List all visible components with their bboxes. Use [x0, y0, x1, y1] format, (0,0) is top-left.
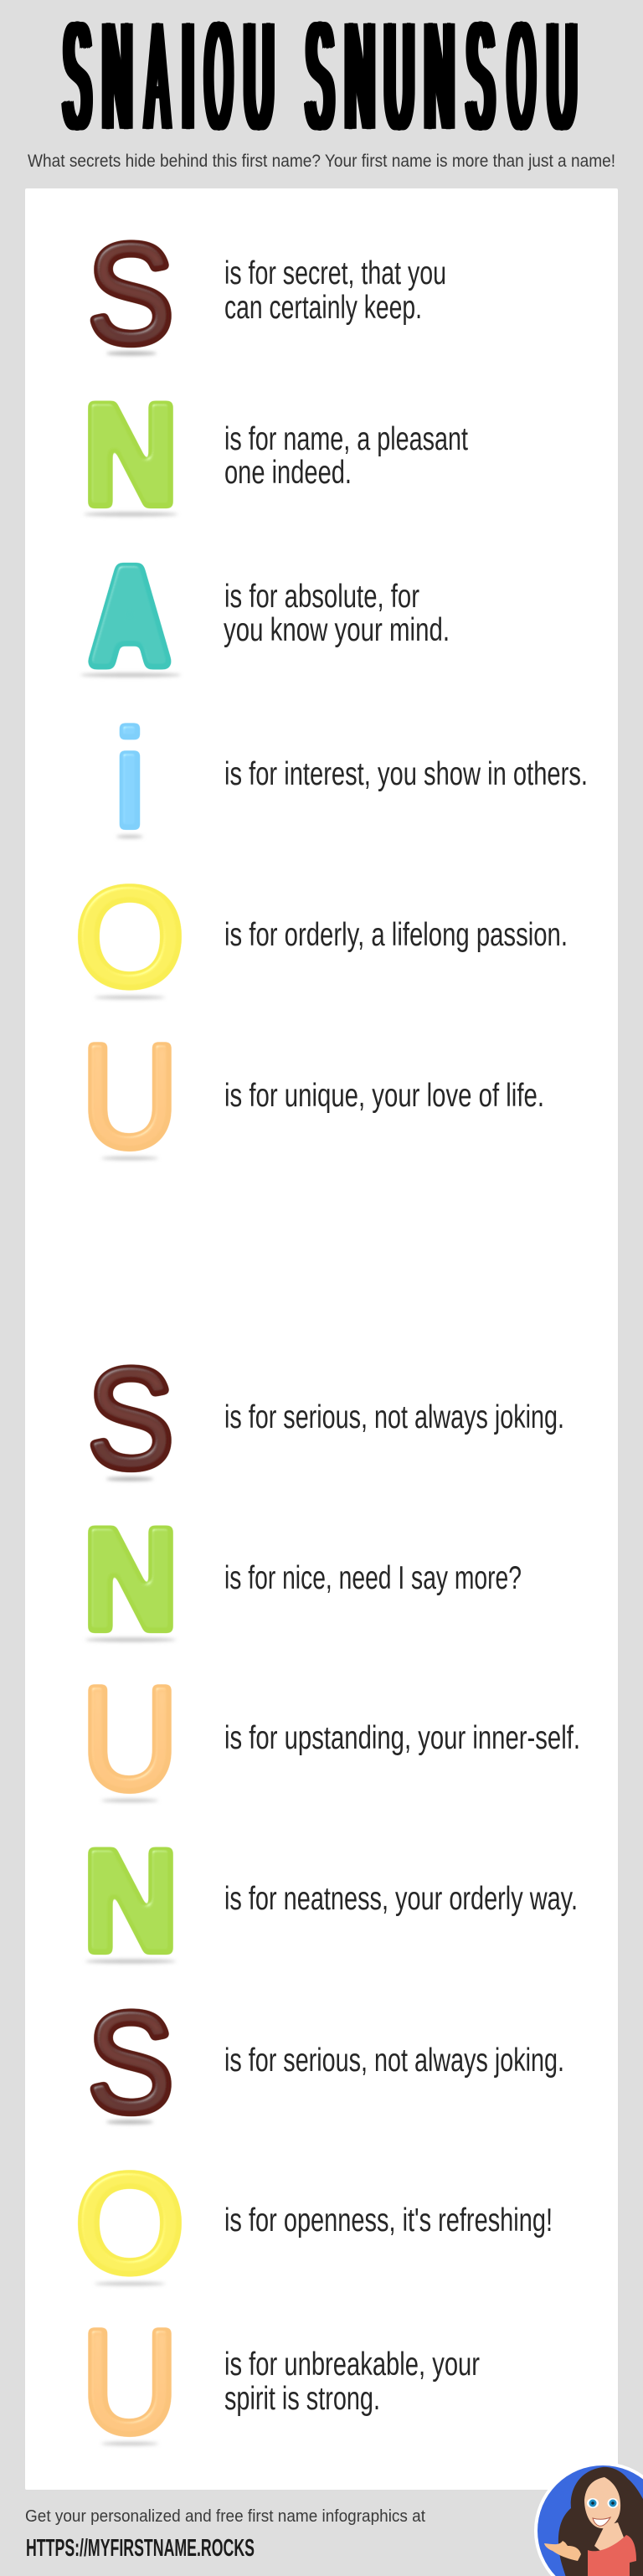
shadow under U	[101, 1157, 158, 1160]
row: A for absolute	[80, 543, 450, 690]
shadow under O	[95, 996, 165, 999]
shadow under A	[80, 673, 181, 677]
row: N for name	[83, 374, 468, 535]
text: unbreakable: spirit is strong.	[224, 2381, 380, 2417]
shadow under N	[85, 1960, 176, 1963]
shadow under N	[85, 1638, 176, 1641]
row: U for upstanding	[81, 1656, 580, 1820]
icon: letter S: S	[87, 1984, 174, 2141]
row: U for unbreakable	[81, 2300, 480, 2463]
text: secret	[224, 255, 446, 326]
footer call to action: Get your personalized and free first name infographics at	[25, 2507, 425, 2526]
icon: letter O: O	[75, 2146, 184, 2301]
icon: letter N: N	[83, 1820, 178, 1981]
icon: letter U: U	[81, 1014, 178, 1177]
icon: letter U: U	[81, 1656, 178, 1820]
shadow under S	[106, 2120, 153, 2124]
row: U for unique	[81, 1014, 544, 1177]
shadow under U	[101, 2442, 158, 2445]
row: O for orderly	[75, 859, 568, 1015]
shadow under i	[116, 835, 143, 838]
icon: letter S: S	[87, 1340, 174, 1497]
text: name	[224, 421, 468, 491]
icon: letter A: A	[92, 543, 167, 690]
row: S for serious	[87, 1340, 564, 1497]
icon: letter N: N	[83, 1498, 178, 1660]
row: S for serious again	[87, 1984, 564, 2141]
shadow under O	[95, 2282, 165, 2285]
icon: avatar woman in a blue circle	[534, 2462, 643, 2576]
icon: letter S: S	[87, 215, 174, 373]
shadow under U	[101, 1799, 158, 1802]
text: absolute: you know your mind.	[224, 612, 450, 648]
row: S for secret	[87, 215, 446, 373]
shadow under S	[106, 352, 157, 355]
footer url: HTTPS://MYFIRSTNAME.ROCKS	[26, 2535, 255, 2562]
row: N for neatness	[83, 1820, 578, 1981]
text: name: is for name, a pleasant	[224, 421, 468, 457]
row: O for openness	[75, 2146, 553, 2301]
row: I for interest	[111, 701, 588, 858]
icon: letter N: N	[83, 374, 178, 535]
title	[61, 0, 578, 162]
shadow under S	[106, 1477, 153, 1481]
text: absolute: is for absolute, for	[224, 579, 419, 615]
text: unbreakable	[224, 2347, 480, 2417]
text: unbreakable: is for unbreakable, your	[224, 2347, 480, 2383]
text: unique: is for unique, your love of life.	[224, 1078, 544, 1114]
row: N for nice	[83, 1498, 522, 1660]
icon: letter O: O	[75, 859, 184, 1015]
shadow under N	[84, 513, 177, 516]
text: secret: is for secret, that you	[224, 255, 446, 291]
icon: letter U: U	[81, 2300, 178, 2463]
icon: letter i: i	[111, 701, 148, 858]
text: nice: is for nice, need I say more?	[224, 1560, 522, 1596]
text: secret: can certainly keep.	[224, 290, 422, 326]
text: absolute	[224, 579, 450, 648]
text: name: one indeed.	[224, 455, 352, 491]
